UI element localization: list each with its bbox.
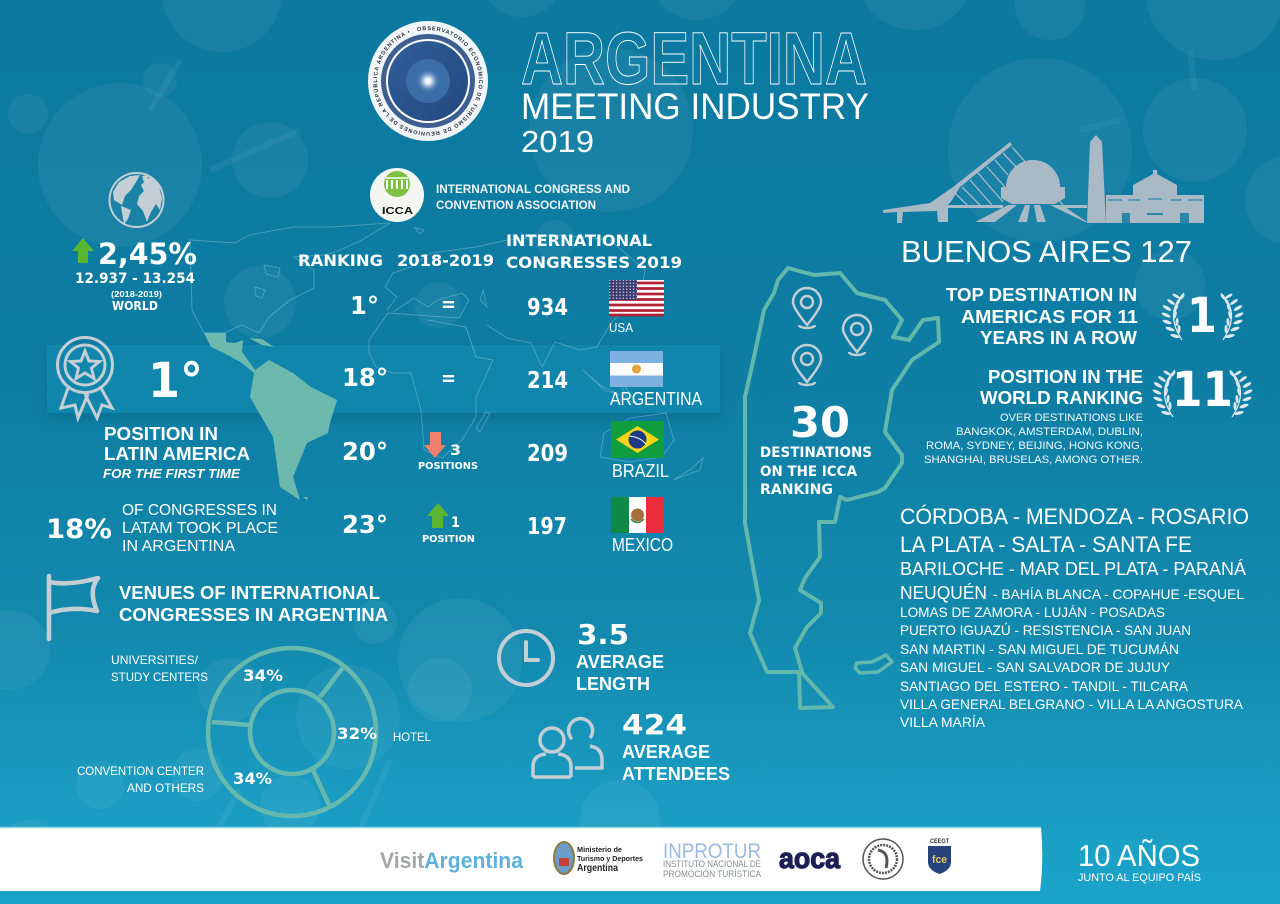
row: USA: 934: [527, 295, 568, 321]
donut chart: venues: AND OTHERS: [127, 781, 204, 795]
Argentina map outline: [745, 268, 939, 708]
icon: green up arrow: [427, 503, 449, 528]
ICCA logo: [370, 168, 424, 222]
icon: green up arrow: [72, 238, 94, 263]
row: Brazil: POSITIONS: [418, 461, 478, 472]
average attendees stat: [622, 708, 730, 784]
venues heading: CONGRESSES IN ARGENTINA: [119, 605, 388, 625]
destinations list: LOMAS DE ZAMORA - LUJÁN - POSADAS: [900, 604, 1165, 620]
row: Mexico: POSITION: [422, 534, 475, 545]
icon: globe: [110, 173, 164, 227]
Buenos Aires heading: BUENOS AIRES 127: [901, 234, 1192, 269]
footer band: [0, 827, 1042, 891]
icon: people: [533, 719, 602, 777]
header logo: observatorio seal: OBSERVATORIO ECONÓMICO DE TURISMO DE REUNIONES DE LA REPÚBLICA ARGENTINA •: [372, 26, 483, 136]
top destination text: AMERICAS FOR 11: [961, 307, 1138, 327]
world growth stat: [72, 237, 197, 313]
row: Mexico: MEXICO: [612, 535, 673, 555]
18 percent stat: OF CONGRESSES IN: [122, 502, 277, 519]
logo: INPROTUR: [663, 840, 761, 879]
destinations list: SANTIAGO DEL ESTERO - TANDIL - TILCARA: [900, 678, 1189, 694]
icon: medal: [58, 338, 112, 418]
logo: VisitArgentina: VisitArgentina: [380, 848, 524, 873]
row: Brazil: BRAZIL: [612, 461, 669, 481]
row: Brazil: 3: [450, 443, 461, 459]
top destination text: TOP DESTINATION IN: [946, 285, 1137, 305]
row: USA: USA: [609, 320, 633, 335]
icon: clock: [499, 631, 553, 685]
world ranking text: [924, 367, 1143, 466]
18 percent stat: LATAM TOOK PLACE: [122, 520, 278, 537]
row: Mexico: 23°: [342, 510, 388, 539]
row: Brazil: 20°: [342, 437, 388, 466]
average length stat: 3.5: [577, 618, 629, 651]
logo: Ministerio de Turismo y Deportes: Argentina: [577, 863, 618, 874]
world growth stat: (2018-2019): [111, 289, 162, 299]
ten years tagline: JUNTO AL EQUIPO PAÍS: [1078, 871, 1201, 884]
world growth stat: 12.937 - 13.254: [75, 271, 195, 287]
row: Argentina: [342, 351, 702, 409]
destinations list: VILLA GENERAL BELGRANO - VILLA LA ANGOSTURA: [900, 696, 1244, 712]
flag: USA: [609, 280, 664, 316]
logo: fce shield: [928, 839, 951, 874]
destinations list: VILLA MARÍA: [900, 714, 986, 730]
row: USA: =: [441, 292, 456, 316]
first position in Latin America: LATIN AMERICA: [104, 444, 250, 464]
world ranking text: ROMA, SYDNEY, BEIJING, HONG KONG,: [926, 440, 1143, 452]
average attendees stat: AVERAGE: [622, 742, 710, 762]
ICCA description: CONVENTION ASSOCIATION: [436, 198, 596, 212]
destinations list: [900, 504, 1249, 730]
row: Mexico: 1: [451, 515, 460, 531]
destinations list: SAN MARTIN - SAN MIGUEL DE TUCUMÁN: [900, 641, 1179, 657]
badge: laurel 11: 11: [1172, 362, 1233, 418]
first position in Latin America: 1°: [148, 353, 203, 409]
donut chart: venues: 34%: [243, 666, 283, 685]
logo: Ministerio de Turismo y Deportes: Turismo y Deportes: [577, 854, 643, 863]
logo: fce shield: CEEGT: [930, 839, 949, 845]
flag: Brazil: [611, 421, 664, 458]
logo: fce shield: fce: [932, 854, 947, 866]
world ranking text: SHANGHAI, BRUSELAS, AMONG OTHER.: [924, 454, 1143, 466]
row: Argentina: =: [441, 366, 456, 390]
flag: Mexico: [611, 497, 663, 533]
30 destinations stat: [760, 398, 872, 498]
title: ARGENTINA: [521, 17, 867, 100]
world growth stat: WORLD: [112, 299, 158, 313]
logo: INPROTUR: PROMOCIÓN TURÍSTICA: [663, 869, 761, 879]
logo: INPROTUR: INPROTUR: [663, 840, 761, 863]
first position in Latin America: FOR THE FIRST TIME: [103, 466, 240, 481]
18 percent stat: 18%: [46, 514, 112, 545]
row: Argentina: ARGENTINA: [610, 389, 702, 409]
icon: flag: [49, 576, 98, 639]
destinations list: NEUQUÉN: [900, 582, 987, 603]
donut chart: venues: HOTEL: [393, 730, 431, 744]
logo: Ministerio de Turismo y Deportes: [554, 842, 643, 874]
logo: aoca: aoca: [779, 843, 841, 875]
row: USA: 1°: [350, 291, 379, 320]
destinations list: CÓRDOBA - MENDOZA - ROSARIO: [900, 504, 1249, 529]
venues heading: [119, 583, 388, 625]
ranking table headers: CONGRESSES 2019: [506, 253, 682, 272]
badge: laurel 11: [1152, 362, 1253, 418]
donut chart: venues: CONVENTION CENTER: [77, 764, 204, 778]
average attendees stat: 424: [622, 708, 687, 741]
Latin America map: [204, 333, 337, 500]
world ranking text: BANGKOK, AMSTERDAM, DUBLIN,: [956, 426, 1143, 438]
world ranking text: OVER DESTINATIONS LIKE: [1000, 412, 1143, 424]
ranking table headers: 2018-2019: [397, 251, 494, 270]
first position in Latin America: [103, 353, 250, 481]
donut chart: venues: UNIVERSITIES/: [111, 653, 199, 667]
donut chart: venues: STUDY CENTERS: [111, 670, 208, 684]
world ranking text: POSITION IN THE: [988, 367, 1143, 387]
destinations list: - BAHÍA BLANCA - COPAHUE -ESQUEL: [993, 586, 1244, 602]
Buenos Aires skyline: [883, 135, 1204, 223]
panel: highlighted Argentina band: [47, 345, 720, 418]
18 percent stat: IN ARGENTINA: [122, 538, 235, 555]
top destination text: [946, 285, 1138, 348]
world ranking text: WORLD RANKING: [980, 388, 1143, 408]
logo: university seal: [863, 839, 903, 879]
30 destinations stat: DESTINATIONS: [760, 445, 872, 461]
30 destinations stat: 30: [790, 398, 850, 447]
row: USA: [350, 280, 664, 335]
average length stat: LENGTH: [576, 674, 650, 694]
average length stat: AVERAGE: [576, 652, 664, 672]
logo: Ministerio de Turismo y Deportes: Ministerio de: [577, 845, 622, 854]
first position in Latin America: POSITION IN: [104, 424, 218, 444]
ranking table headers: RANKING: [298, 251, 383, 270]
row: Brazil: [342, 421, 669, 481]
icon: map pins: [793, 288, 871, 385]
18 percent stat: [46, 502, 278, 555]
world growth stat: 2,45%: [98, 237, 197, 271]
donut chart: venues: 34%: [233, 769, 272, 788]
average attendees stat: ATTENDEES: [622, 764, 730, 784]
ranking table headers: INTERNATIONAL: [506, 231, 652, 250]
30 destinations stat: RANKING: [760, 482, 833, 498]
30 destinations stat: ON THE ICCA: [760, 464, 857, 480]
destinations list: BARILOCHE - MAR DEL PLATA - PARANÁ: [900, 558, 1247, 579]
badge: laurel 1: [1161, 288, 1244, 344]
title: 2019: [521, 124, 594, 159]
badge: laurel 1: 1: [1187, 288, 1217, 344]
row: Argentina: 18°: [342, 363, 388, 392]
top destination text: YEARS IN A ROW: [980, 328, 1137, 348]
title: MEETING INDUSTRY: [521, 86, 869, 127]
ten years tagline: 10 AÑOS: [1078, 838, 1200, 873]
row: Argentina: 214: [527, 368, 568, 394]
donut chart: venues: [77, 648, 431, 816]
donut chart: venues: 32%: [337, 724, 377, 743]
row: Brazil: 209: [527, 441, 568, 467]
venues heading: VENUES OF INTERNATIONAL: [119, 583, 380, 603]
ICCA description: INTERNATIONAL CONGRESS AND: [436, 182, 630, 196]
icon: salmon down arrow: [424, 432, 446, 458]
row: Mexico: [342, 497, 673, 555]
average length stat: [576, 618, 664, 694]
world map outline: [190, 223, 703, 480]
ICCA description: [436, 182, 630, 212]
ranking table headers: [298, 231, 682, 272]
row: Mexico: 197: [527, 514, 567, 540]
logo: INPROTUR: INSTITUTO NACIONAL DE: [663, 859, 761, 869]
title: [521, 17, 869, 159]
destinations list: PUERTO IGUAZÚ - RESISTENCIA - SAN JUAN: [900, 622, 1191, 638]
destinations list: SAN MIGUEL - SAN SALVADOR DE JUJUY: [900, 659, 1171, 675]
destinations list: LA PLATA - SALTA - SANTA FE: [900, 532, 1192, 557]
flag: Argentina: [610, 351, 663, 387]
ICCA logo: ICCA: [382, 206, 413, 217]
